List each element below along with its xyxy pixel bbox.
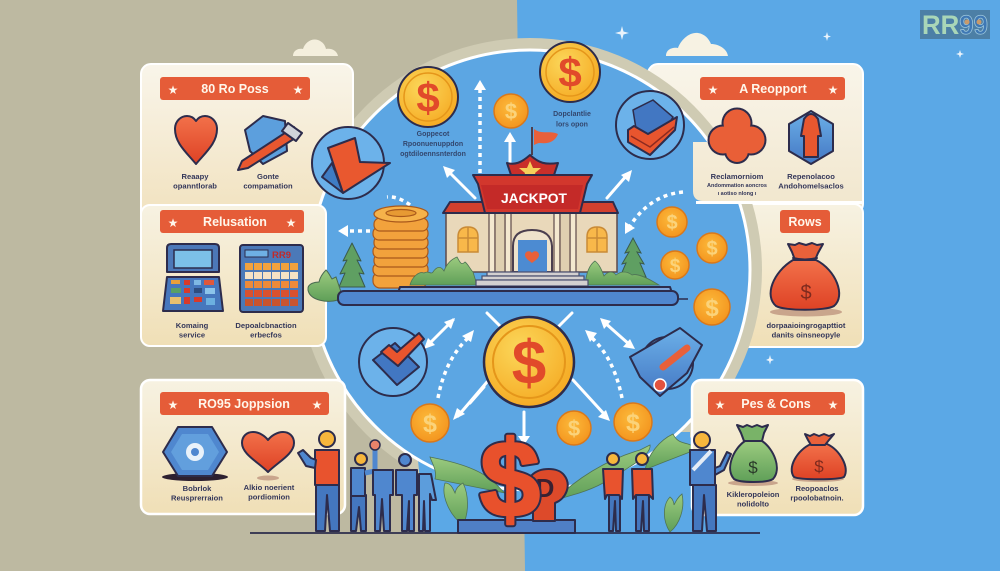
heading: A Reopport xyxy=(700,77,845,100)
heading: 80 Ro Poss: ★ xyxy=(293,83,303,97)
heading: Rows: Rows xyxy=(788,215,822,229)
coin: right 3 xyxy=(697,233,727,263)
panel: 80 Ro Poss content xyxy=(160,77,310,190)
building walls xyxy=(446,210,617,272)
heading: RO95 Joppsion xyxy=(160,392,329,415)
sign: Jackpot: JACKPOT xyxy=(501,190,567,206)
people group: right xyxy=(603,432,731,531)
text: left label: service xyxy=(179,330,205,340)
text: right label: Repenolacoo xyxy=(787,172,835,181)
text: label: dorpaaioingrogapttiot xyxy=(767,321,845,330)
text: right label: Andohomelsaclos xyxy=(778,182,844,190)
text: right label: Alkio noerient xyxy=(244,483,294,492)
text: left label: Kikleropoleion xyxy=(727,490,779,499)
text: left label: opanntlorab xyxy=(173,182,217,190)
steps xyxy=(476,272,588,286)
person: red shirt with raised arm xyxy=(298,431,339,531)
lower blue slab xyxy=(458,520,575,533)
coin: lower middle: $ xyxy=(568,416,580,441)
coin: right 4: $ xyxy=(705,295,719,322)
coin stack xyxy=(373,206,428,288)
text: center right caption: lors opon xyxy=(556,122,588,128)
text: right label: compamation xyxy=(243,182,293,190)
text: center right caption: Dopclantlie xyxy=(553,111,591,118)
heading: Relusation xyxy=(160,210,304,233)
coin: right 3: $ xyxy=(706,238,718,260)
icon: calculator xyxy=(163,244,223,311)
coin: upper center: $ xyxy=(558,49,582,96)
people group: left xyxy=(298,431,436,531)
heading: RO95 Joppsion: ★ xyxy=(168,398,178,412)
icon: green money bag: $ xyxy=(748,458,758,477)
panel background xyxy=(141,380,345,514)
text: right label: rpoolobatnoin. xyxy=(790,494,844,502)
central blue disc xyxy=(310,50,750,490)
coin: lower left: $ xyxy=(423,410,437,438)
panel: RO95 Joppsion xyxy=(141,380,345,514)
heading: 80 Ro Poss: ★ xyxy=(168,83,178,97)
heading: Pes & Cons: ★ xyxy=(715,398,725,412)
coin: small top: $ xyxy=(505,99,517,124)
person: dark blue xyxy=(373,470,393,531)
gable with star xyxy=(507,155,558,180)
text: label: danits oinsneopyle xyxy=(772,330,840,340)
tree: left xyxy=(339,243,365,287)
windows xyxy=(458,227,607,252)
bush: far left xyxy=(308,270,341,301)
coin: upper center xyxy=(540,42,600,102)
coin: right 2 xyxy=(661,251,689,279)
panel: A Reopport content xyxy=(700,77,845,197)
icon: calendar xyxy=(240,245,303,312)
text: right label: pordiomion xyxy=(248,492,290,502)
icon: clover xyxy=(708,108,766,164)
columns xyxy=(489,213,576,272)
panel divider strip xyxy=(696,201,863,204)
heading: A Reopport: A Reopport xyxy=(739,82,808,96)
icon: blue shield and pencil xyxy=(238,116,302,170)
heading: Relusation: ★ xyxy=(168,216,178,230)
arrows: lower cluster xyxy=(424,313,635,445)
coin: lower left xyxy=(411,404,449,442)
tree: right xyxy=(620,238,646,277)
coin: right 2: $ xyxy=(670,256,681,277)
text: center left caption: ogtdiloennsnterdon xyxy=(400,151,466,158)
cloud: right xyxy=(666,33,728,56)
blue fill below the disc xyxy=(418,432,690,533)
person: presenter in blue xyxy=(690,432,731,531)
icon: hexagon and up arrow xyxy=(789,111,833,164)
heading: A Reopport: ★ xyxy=(828,83,838,97)
text: left label: nolidolto xyxy=(737,500,769,508)
heading: 80 Ro Poss: 80 Ro Poss xyxy=(201,82,269,96)
person: blue with round head xyxy=(396,454,417,531)
icon: calendar: RR9 xyxy=(272,250,291,261)
bushes beside building xyxy=(410,257,659,285)
panel background: A Reopport lower-left patch xyxy=(693,142,862,201)
platform xyxy=(338,287,688,305)
heading: Pes & Cons: ★ xyxy=(828,398,838,412)
coin: lower middle xyxy=(557,411,591,445)
icon: red money bag: $ xyxy=(814,457,824,476)
text: left label: Bobrlok xyxy=(183,484,211,493)
arrows: upper cluster xyxy=(338,80,683,237)
icon: big dollar statue: D xyxy=(536,473,554,503)
icon: big dollar statue: $ xyxy=(480,418,540,539)
icon: heart xyxy=(242,432,294,480)
heading: A Reopport: ★ xyxy=(708,83,718,97)
text: left label: Reusprerraion xyxy=(171,494,223,502)
sparkles in the sky xyxy=(615,26,964,364)
icon: red money bag xyxy=(792,434,846,482)
icon: big dollar statue xyxy=(480,418,568,539)
text: left label: ı aotiso nlong ı xyxy=(718,191,757,197)
text: right label: Gonte xyxy=(257,172,279,181)
text: left label: Reaapy xyxy=(181,172,209,181)
icon: hexagon badge xyxy=(162,427,228,481)
logo: RR99 watermark: RR99 xyxy=(922,10,988,40)
icon: red money bag: $ xyxy=(800,282,812,304)
coin: right 4 xyxy=(694,289,730,325)
coin: upper left: $ xyxy=(416,74,440,121)
coin: right 1 xyxy=(657,207,687,237)
heading: RO95 Joppsion: ★ xyxy=(312,398,322,412)
text: right label: erbecfos xyxy=(250,330,282,340)
text: right label: Depoalcbnaction xyxy=(235,321,297,330)
ground line xyxy=(250,532,760,534)
heading: RO95 Joppsion: RO95 Joppsion xyxy=(198,397,290,411)
heading: Pes & Cons: Pes & Cons xyxy=(741,397,811,411)
heading: Relusation: Relusation xyxy=(203,215,267,229)
coin: small top xyxy=(494,94,528,128)
panel background: A Reopport upper xyxy=(648,64,863,214)
text: left label: Komaing xyxy=(176,321,208,330)
person: small blue xyxy=(351,440,380,531)
coin: lower right: $ xyxy=(626,409,640,437)
heading: Relusation: ★ xyxy=(286,216,296,230)
person: red shirt left xyxy=(603,453,623,531)
building: Jackpot casino xyxy=(338,127,688,305)
flag xyxy=(532,127,558,155)
heading: Pes & Cons xyxy=(708,392,845,415)
text: center left caption: Goppecot xyxy=(417,131,449,138)
icon: card with check, lower right xyxy=(630,328,702,396)
coin: large center: $ xyxy=(512,329,546,398)
door xyxy=(513,230,552,272)
panel: Rows content xyxy=(767,210,846,340)
text: left label: Reclamorniom xyxy=(711,172,763,181)
text: center left caption: Rpoonuenuppdon xyxy=(403,141,463,148)
panel background: Rows xyxy=(700,204,863,347)
coin: upper left xyxy=(398,67,458,127)
bottom leaves xyxy=(430,434,695,532)
icon: green money bag xyxy=(728,425,778,486)
text: right label: Reopoaclos xyxy=(795,484,839,493)
panel background: 80 Ro Poss xyxy=(141,64,353,224)
icon: big dollar statue: $ xyxy=(480,418,540,539)
icon: heart xyxy=(175,116,217,164)
person: blue back view xyxy=(419,474,436,531)
panel: Relusation xyxy=(141,205,326,346)
person: red shirt right xyxy=(632,453,653,531)
cloud: left xyxy=(293,39,338,56)
eaves xyxy=(443,202,618,213)
panel: Pes & Cons xyxy=(692,380,863,515)
sign: Jackpot xyxy=(473,175,592,213)
text: left label: Andommation aoncros xyxy=(707,183,767,189)
heading: 80 Ro Poss xyxy=(160,77,310,100)
coin: right 1: $ xyxy=(666,212,678,234)
central ring xyxy=(298,38,762,502)
coin: lower right xyxy=(614,403,652,441)
icon circle: check mark, lower left xyxy=(359,328,427,396)
icon circle: red paper, upper left xyxy=(312,127,390,199)
coin: large center xyxy=(484,317,574,407)
icon circle: check, upper right xyxy=(616,91,684,159)
panel background xyxy=(692,380,863,515)
panel background xyxy=(141,205,326,346)
